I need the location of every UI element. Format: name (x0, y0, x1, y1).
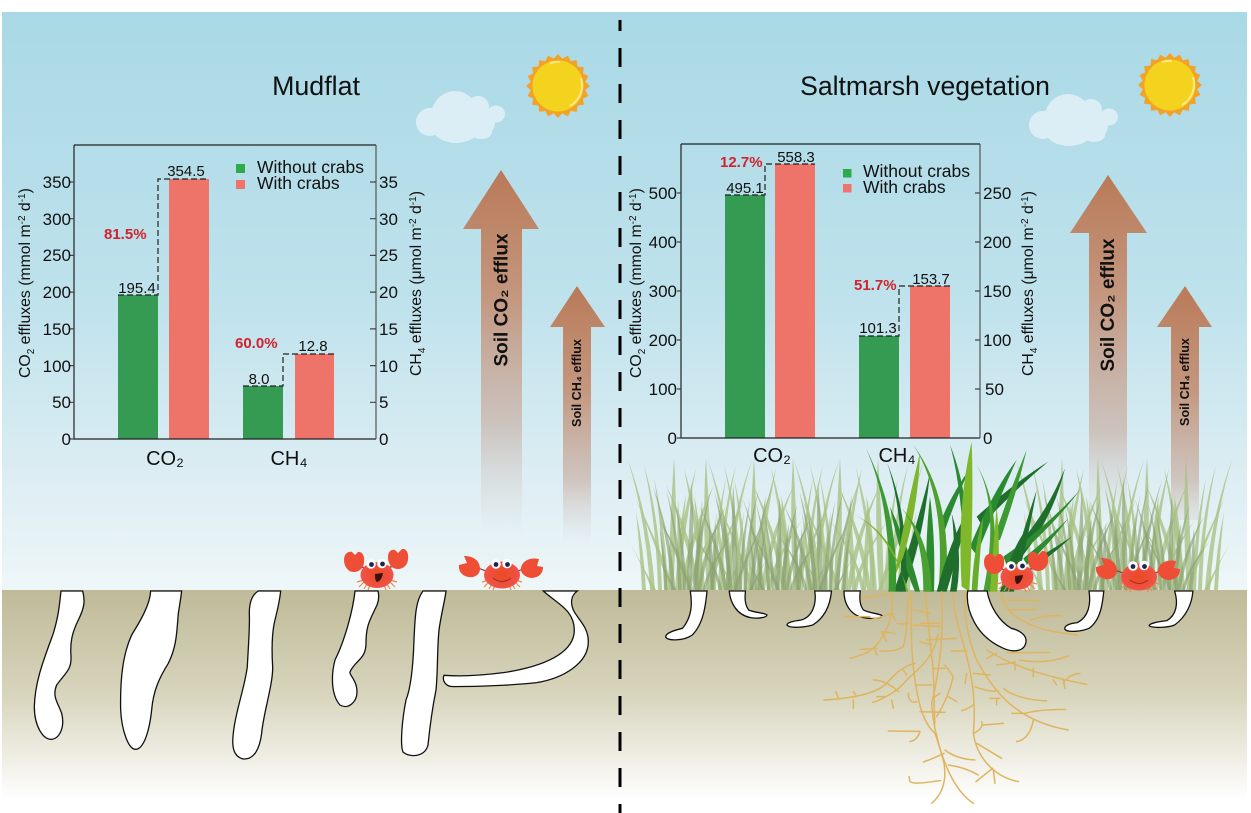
percent increases: 12.7% (720, 154, 763, 171)
left axis ticks: 100 (43, 357, 71, 376)
title: Mudflat: Mudflat (272, 71, 360, 101)
category labels: CH₄ (270, 448, 308, 470)
y axis label: CH4: -1 (1020, 196, 1031, 205)
mud ground (2, 590, 1247, 813)
panel: saltmarsh bar chart (628, 144, 1040, 467)
right axis ticks (379, 173, 398, 449)
axes frame (677, 144, 980, 438)
category labels: CH₄ (878, 445, 916, 467)
title: Saltmarsh vegetation: Saltmarsh vegetation (800, 71, 1050, 101)
crab mudflat: mouth open (344, 549, 408, 590)
sky background (2, 12, 1247, 590)
left axis ticks: 150 (43, 320, 71, 339)
y axis label: CO2: -1 (628, 193, 639, 202)
right axis ticks: 25 (379, 246, 398, 265)
left axis ticks: 200 (649, 331, 677, 350)
left axis ticks: 400 (649, 233, 677, 252)
y axis label: CO2: ) (628, 188, 645, 193)
dark central grass clump (855, 442, 1080, 592)
y axis label: CO2: CO (17, 354, 34, 378)
y axis label: CH4: effluxes (μmol m (1020, 227, 1037, 348)
dashed comparison lines (725, 164, 950, 336)
saltmarsh burrows (666, 591, 1193, 651)
value labels: 101.3 (859, 320, 897, 337)
percent increases (104, 226, 278, 352)
right axis ticks: 5 (379, 393, 388, 412)
right axis ticks: 100 (983, 331, 1011, 350)
y axis label: CO2: ) (17, 188, 34, 193)
y axis label: CO2: d (17, 202, 34, 215)
y axis label: CO2: d (628, 202, 645, 215)
right axis ticks: 20 (379, 283, 398, 302)
category labels (753, 445, 916, 467)
axes frame (70, 145, 376, 439)
left axis ticks: 0 (62, 430, 71, 449)
value labels (118, 163, 328, 388)
arrow: soil CH4 efflux saltmarsh (1157, 286, 1212, 520)
y axis label: CO2: -2 (628, 215, 639, 224)
right axis ticks: 150 (983, 282, 1011, 301)
arrow: soil CH4 efflux mudflat: Soil CH₄ efflux (570, 339, 584, 427)
left axis ticks (649, 184, 677, 448)
left axis ticks: 300 (649, 282, 677, 301)
percent increases (720, 154, 897, 294)
legend (843, 161, 970, 197)
arrow: soil CH4 efflux mudflat (550, 286, 605, 545)
left axis ticks (43, 173, 71, 449)
right axis ticks: 15 (379, 320, 398, 339)
right axis ticks: 30 (379, 210, 398, 229)
bars (118, 179, 334, 439)
y axis label: CO2: 2 (26, 348, 37, 354)
crab saltmarsh: mouth open (984, 551, 1048, 592)
icon: sun left (526, 54, 590, 118)
mudflat burrows (34, 591, 588, 759)
y axis label: CH4: effluxes (μmol m (408, 227, 425, 348)
left axis ticks: 0 (668, 429, 677, 448)
y axis label: CH4: d (408, 205, 425, 218)
icon: sun right (1138, 53, 1202, 117)
y axis label: CO2: -2 (17, 215, 28, 224)
y axis label: CO2: effluxes (mmol m (628, 224, 645, 349)
legend: Without crabs (257, 157, 364, 177)
arrow: soil CO2 efflux saltmarsh: Soil CO₂ efflux (1098, 238, 1119, 372)
y axis label: CH4: CH (408, 353, 425, 376)
right axis ticks: 200 (983, 233, 1011, 252)
right axis ticks: 50 (985, 380, 1004, 399)
arrow: soil CH4 efflux saltmarsh: Soil CH₄ efflux (1178, 338, 1192, 426)
category labels: CO₂ (753, 445, 791, 467)
plant roots (824, 592, 1087, 803)
value labels (726, 149, 950, 337)
left axis ticks: 50 (52, 393, 71, 412)
legend: With crabs (863, 177, 946, 197)
crab saltmarsh: smiling (1096, 558, 1180, 592)
dashed comparison lines (118, 179, 334, 386)
right axis ticks: 10 (379, 357, 398, 376)
left axis ticks: 350 (43, 173, 71, 192)
center divider (618, 20, 622, 813)
y axis label: CH4: -2 (1020, 218, 1031, 227)
icon: cloud right (1029, 94, 1118, 146)
left axis ticks: 100 (649, 380, 677, 399)
legend: With crabs (257, 173, 340, 193)
category labels (146, 448, 308, 470)
y axis label: CH4: -2 (408, 218, 419, 227)
right axis ticks: 0 (983, 429, 992, 448)
arrow: soil CO2 efflux mudflat (463, 170, 539, 535)
y axis label: CH4: CH (1020, 353, 1037, 376)
arrow: soil CO2 efflux saltmarsh (1070, 175, 1147, 520)
y axis label: CH4: 4 (1029, 347, 1040, 353)
value labels: 8.0 (249, 371, 269, 388)
icon: cloud left (416, 91, 505, 143)
y axis label: CO2: CO (628, 354, 645, 378)
value labels: 558.3 (777, 149, 815, 166)
y axis label: CH4: 4 (417, 347, 428, 353)
right axis ticks: 0 (379, 430, 388, 449)
y axis label: CH4: -1 (408, 196, 419, 205)
left axis ticks: 200 (43, 283, 71, 302)
left axis ticks: 300 (43, 210, 71, 229)
right axis ticks: 35 (379, 173, 398, 192)
legend (236, 157, 364, 193)
value labels: 12.8 (298, 338, 328, 355)
bars (725, 164, 950, 438)
y axis label: CO2: effluxes (mmol m (17, 224, 34, 349)
percent increases: 60.0% (235, 335, 278, 352)
pale saltmarsh grass (622, 458, 1238, 590)
panel: mudflat bar chart (17, 145, 428, 470)
legend: Without crabs (863, 161, 970, 181)
right axis ticks: 250 (983, 184, 1011, 203)
value labels: 495.1 (726, 180, 764, 197)
y axis label: CO2: 2 (637, 348, 648, 354)
value labels: 195.4 (118, 280, 156, 297)
left axis ticks: 250 (43, 246, 71, 265)
value labels: 153.7 (912, 271, 950, 288)
y axis label: CH4: ) (408, 191, 425, 196)
percent increases: 51.7% (854, 277, 897, 294)
percent increases: 81.5% (104, 226, 147, 243)
arrow: soil CO2 efflux mudflat: Soil CO₂ efflux (492, 233, 512, 367)
value labels: 354.5 (167, 163, 205, 180)
right axis ticks (983, 184, 1011, 448)
y axis label: CO2: -1 (17, 193, 28, 202)
y axis label: CH4: d (1020, 205, 1037, 218)
left axis ticks: 500 (649, 184, 677, 203)
y axis label: CH4: ) (1020, 191, 1037, 196)
crab mudflat: smiling (459, 556, 543, 590)
category labels: CO₂ (146, 448, 184, 470)
